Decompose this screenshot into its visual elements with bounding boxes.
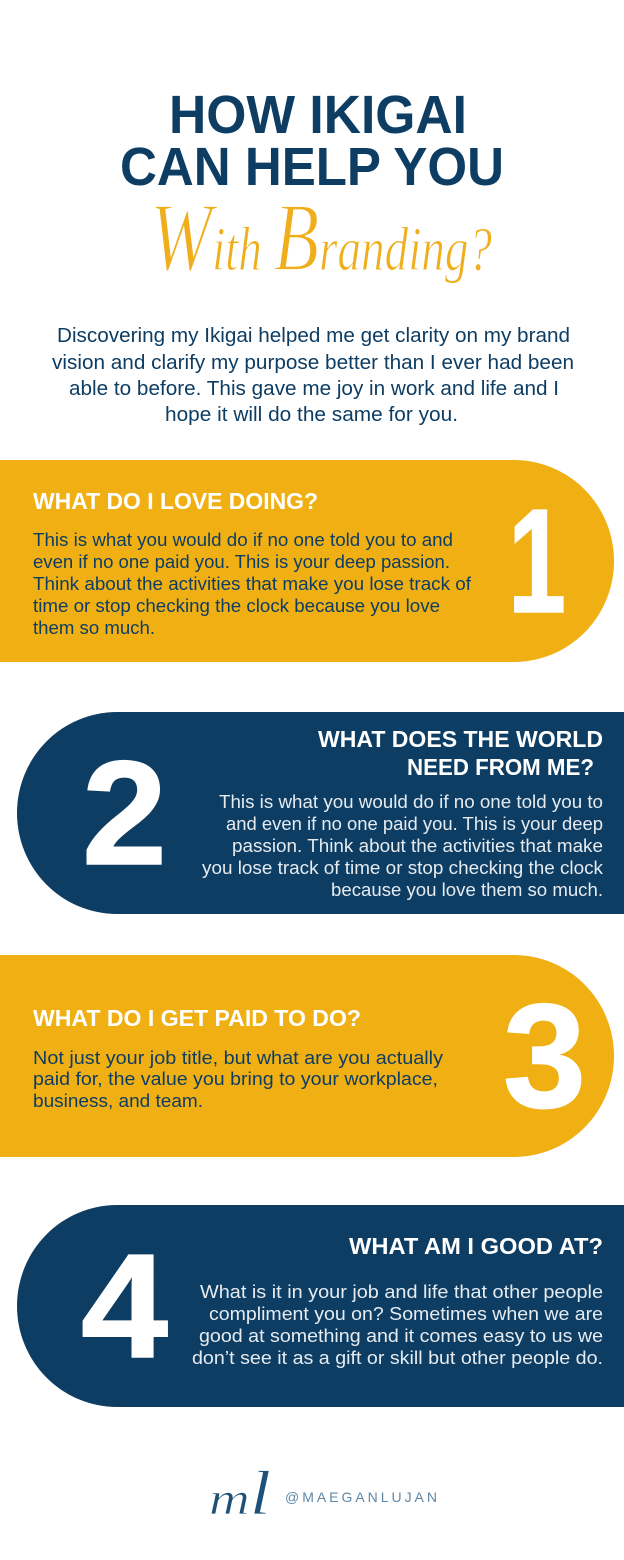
body 2: and even if no one paid you. This is your deep <box>226 814 603 834</box>
heading 1: WHAT DO I LOVE DOING? <box>33 488 318 514</box>
heading 2 <box>318 726 603 780</box>
number 1: 1 <box>508 479 566 644</box>
intro text: able to before. This gave me joy in work and life and I <box>69 378 559 400</box>
body 1: even if no one paid you. This is your deep passion. <box>33 552 450 572</box>
body 2: passion. Think about the activities that make <box>232 836 603 856</box>
body 1 <box>33 530 472 638</box>
body 2: you lose track of time or stop checking the clock <box>202 858 604 878</box>
heading 3: WHAT DO I GET PAID TO DO? <box>33 1005 361 1031</box>
panel 3: what do I get paid to do <box>0 955 614 1157</box>
panel 2: what does the world need from me <box>17 712 624 914</box>
heading 2: WHAT DOES THE WORLD <box>318 726 603 752</box>
number 3: 3 <box>503 974 586 1139</box>
body 4: don’t see it as a gift or skill but other people do. <box>192 1348 603 1368</box>
body 3: paid for, the value you bring to your workplace, <box>33 1069 438 1089</box>
body 3: business, and team. <box>33 1091 203 1111</box>
handle: @MAEGANLUJAN <box>285 1489 437 1505</box>
intro text: vision and clarify my purpose better than I ever had been <box>52 352 574 374</box>
logo monogram: ml <box>209 1460 271 1528</box>
body 3 <box>33 1048 443 1111</box>
intro text: hope it will do the same for you. <box>165 404 458 426</box>
heading 4: WHAT AM I GOOD AT? <box>349 1233 603 1259</box>
body 4: compliment you on? Sometimes when we are <box>209 1304 603 1324</box>
subtitle: script: With Branding? <box>150 184 492 292</box>
number 4: 4 <box>81 1224 168 1389</box>
body 2 <box>202 792 604 900</box>
body 4: good at something and it comes easy to us we <box>199 1326 603 1346</box>
body 1: time or stop checking the clock because you love <box>33 596 440 616</box>
heading 2: NEED FROM ME? <box>407 754 594 780</box>
panel 4: what am I good at <box>17 1205 624 1407</box>
body 1: Think about the activities that make you lose track of <box>33 574 472 594</box>
footer <box>209 1460 437 1528</box>
intro text: Discovering my Ikigai helped me get clarity on my brand <box>57 325 570 347</box>
number 2: 2 <box>82 731 167 896</box>
body 1: them so much. <box>33 618 155 638</box>
body 4: What is it in your job and life that other people <box>200 1282 603 1302</box>
body 2: This is what you would do if no one told you to <box>219 792 603 812</box>
title <box>120 85 504 197</box>
title: CAN HELP YOU <box>120 137 504 197</box>
intro text <box>52 325 574 426</box>
panel 1: what do I love doing <box>0 460 614 662</box>
body 4 <box>192 1282 603 1368</box>
body 2: because you love them so much. <box>331 880 603 900</box>
body 3: Not just your job title, but what are you actually <box>33 1048 443 1068</box>
title: HOW IKIGAI <box>169 85 467 145</box>
body 1: This is what you would do if no one told you to and <box>33 530 453 550</box>
